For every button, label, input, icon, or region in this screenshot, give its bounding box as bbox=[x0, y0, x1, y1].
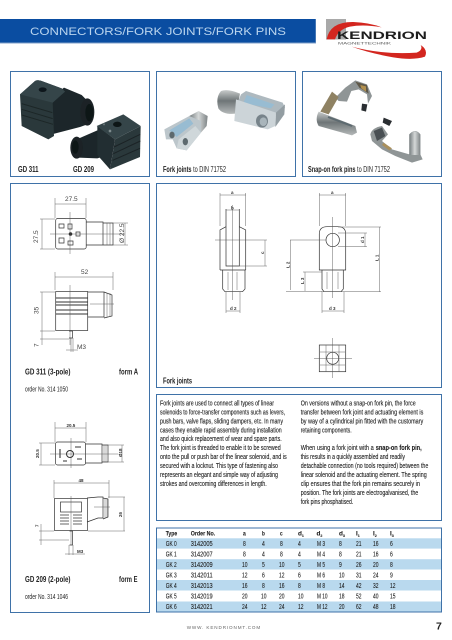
dimension: l2: L 2 bbox=[286, 261, 290, 268]
dimension: l1: L 1 bbox=[374, 254, 380, 261]
row GK 2: 10 bbox=[242, 560, 248, 569]
row GK 4 bbox=[166, 581, 396, 590]
table header: 1 bbox=[358, 534, 360, 538]
row GK 4: GK 4 bbox=[166, 581, 177, 590]
caption: GD 311: GD 311 bbox=[18, 165, 39, 174]
row GK 6: 20 bbox=[339, 602, 344, 611]
row GK 3: 12 bbox=[279, 570, 284, 580]
caption: fork joints to DIN: Fork joints to DIN 71752 bbox=[163, 165, 226, 174]
row GK 1: 6 bbox=[390, 550, 393, 558]
dimension: diameter 22.5: Ø 22.5 bbox=[119, 223, 126, 243]
row GK 4: 42 bbox=[356, 581, 362, 590]
row GK 5: 10 bbox=[298, 592, 304, 600]
photo: closed snap-on pin bbox=[370, 118, 423, 163]
row GK 4: 12 bbox=[390, 581, 396, 590]
row GK 1: GK 1 bbox=[166, 550, 177, 558]
row GK 3: 6 bbox=[298, 570, 301, 580]
row GK 3: GK 3 bbox=[166, 570, 177, 580]
dimension: 7: 7 bbox=[34, 343, 40, 347]
footer url: WWW. KENDRIONMT.COM bbox=[187, 625, 260, 630]
row GK 3: 12 bbox=[242, 570, 248, 580]
dimension: 52: 52 bbox=[81, 269, 89, 276]
row GK 6: 24 bbox=[279, 602, 284, 611]
logo: Kendrion Magnettechnik bbox=[326, 19, 427, 59]
text block: left column: push bars, valve flaps, sliding dampers, etc. In many bbox=[160, 416, 283, 425]
row GK 1: 4 bbox=[298, 550, 301, 558]
row GK 5 bbox=[166, 592, 396, 600]
row GK 4: 16 bbox=[242, 581, 248, 590]
photo: small fork joint bbox=[164, 111, 208, 150]
text block: right column: this results in a quickly assembled and readily bbox=[301, 452, 405, 461]
text block: left column: onto the pull or push bar of the linear solenoid, and is bbox=[160, 452, 287, 461]
header bar bbox=[0, 19, 316, 44]
panel: connector drawings and order data bbox=[10, 184, 150, 612]
text block: left column: The fork joint is threaded to enable it to be screwed bbox=[160, 443, 281, 452]
photo: GD 209 connector bbox=[70, 114, 141, 169]
row GK 2: 10 bbox=[279, 560, 284, 569]
row GK 2 bbox=[166, 560, 393, 569]
row GK 6: 3142021 bbox=[191, 602, 213, 611]
text block: right column: When using a fork joint with a bbox=[301, 443, 374, 452]
dimension: 48: 48 bbox=[78, 478, 84, 483]
photo: open snap-on pin bbox=[317, 80, 372, 135]
text block: left column: secured with a locknut. This type of fastening also bbox=[160, 461, 278, 470]
dimension: M3: M3 bbox=[77, 549, 84, 554]
row GK 1: 4 bbox=[262, 550, 265, 558]
row GK 1: M 4 bbox=[317, 550, 325, 558]
drawing: fork joint end view bbox=[314, 338, 352, 378]
table header: Type bbox=[166, 531, 178, 538]
row GK 2: 3142009 bbox=[191, 560, 213, 569]
text block: left column: cases they enable rapid assembly during installation bbox=[160, 425, 282, 434]
row GK 5: 18 bbox=[339, 592, 344, 600]
panel: snap-on fork pins photo bbox=[302, 72, 442, 176]
row GK 2: 9 bbox=[339, 560, 342, 569]
dimension: diameter 18: Ø18 bbox=[118, 448, 123, 457]
table header: 3 bbox=[392, 534, 394, 538]
label: form E: form E bbox=[119, 574, 138, 584]
table header: l bbox=[356, 531, 358, 538]
drawing: fork joint side view bbox=[215, 190, 267, 313]
row GK 5: GK 5 bbox=[166, 592, 177, 600]
row GK 4: 3142013 bbox=[191, 581, 213, 590]
caption: snap-on fork pins to DIN: Snap-on fork pins to DIN 71752 bbox=[308, 165, 390, 174]
row GK 2: GK 2 bbox=[166, 560, 177, 569]
table header: b bbox=[262, 531, 265, 538]
text block: left column: represents an elegant and simple way of adjusting bbox=[160, 470, 278, 479]
row GK 2: 26 bbox=[356, 560, 362, 569]
row GK 5: 40 bbox=[373, 592, 378, 600]
row GK 6 bbox=[166, 602, 396, 611]
row GK 5: 3142019 bbox=[191, 592, 213, 600]
row GK 3: 24 bbox=[373, 570, 378, 580]
drawing: fork joint front view bbox=[286, 190, 381, 313]
photo: large fork joint bbox=[217, 90, 285, 129]
label: GD 311 (3-pole): GD 311 (3-pole) bbox=[25, 366, 71, 376]
dimension: 26: 26 bbox=[118, 511, 123, 517]
table header: l bbox=[373, 531, 375, 538]
title: CONNECTORS/FORK JOINTS/FORK PINS bbox=[30, 26, 286, 38]
text block: left column bbox=[160, 399, 287, 488]
label: form A: form A bbox=[119, 366, 138, 376]
row GK 3 bbox=[166, 570, 393, 580]
row GK 0: 8 bbox=[339, 539, 342, 548]
dimension: 20.5 width: 20.5 bbox=[66, 423, 76, 428]
row GK 0: 6 bbox=[390, 539, 393, 548]
table header bbox=[166, 531, 394, 538]
row GK 5: 20 bbox=[242, 592, 248, 600]
table header: 2 bbox=[375, 534, 377, 538]
row GK 4: 8 bbox=[262, 581, 265, 590]
row GK 1: 16 bbox=[373, 550, 378, 558]
table header: a bbox=[243, 531, 246, 538]
drawing: GD 311 views bbox=[33, 196, 128, 352]
page number: 7 bbox=[436, 620, 442, 632]
dimension: a: a bbox=[231, 190, 234, 195]
row GK 0: 4 bbox=[262, 539, 265, 548]
row GK 2: M 5 bbox=[317, 560, 325, 569]
dimension: d3: d 3 bbox=[329, 306, 336, 311]
table header: Order No. bbox=[191, 531, 215, 538]
row GK 0: 8 bbox=[280, 539, 283, 548]
row GK 1 bbox=[166, 550, 393, 558]
row GK 6: 18 bbox=[390, 602, 396, 611]
text block: right column bbox=[301, 399, 428, 506]
dimension: M3: M3 bbox=[77, 344, 86, 351]
dimension: 20.5 height: 20.5 bbox=[35, 449, 40, 458]
row GK 5: 52 bbox=[356, 592, 362, 600]
row GK 2: 20 bbox=[373, 560, 378, 569]
row GK 3: M 6 bbox=[317, 570, 325, 580]
table row stripes bbox=[157, 538, 441, 612]
table header: l bbox=[390, 531, 392, 538]
dimension: d1: d 1 bbox=[360, 236, 365, 243]
dimension: d2: d 2 bbox=[230, 306, 237, 311]
text block: left column: solenoids to force-transfer components such as levers, bbox=[160, 408, 285, 416]
row GK 6: M 12 bbox=[317, 602, 328, 611]
table header: 3 bbox=[343, 534, 345, 538]
dimension: 7: 7 bbox=[34, 524, 40, 527]
row GK 0: 4 bbox=[298, 539, 301, 548]
dimension: b: b bbox=[231, 206, 234, 210]
panel: fork joints photo bbox=[156, 72, 296, 176]
row GK 6: 12 bbox=[261, 602, 266, 611]
row GK 4: 16 bbox=[279, 581, 284, 590]
row GK 1: 8 bbox=[280, 550, 283, 558]
row GK 0: 21 bbox=[356, 539, 362, 548]
row GK 4: M 8 bbox=[317, 581, 325, 590]
text block: left column: Fork joints are used to connect all types of linear bbox=[160, 399, 274, 408]
row GK 0: M 3 bbox=[317, 539, 325, 548]
row GK 0: 3142005 bbox=[191, 539, 213, 548]
dimension: 35: 35 bbox=[34, 306, 40, 314]
row GK 4: 32 bbox=[373, 581, 378, 590]
row GK 3: 31 bbox=[356, 570, 362, 580]
text block: left column: strokes and overcoming differences in length. bbox=[160, 479, 267, 488]
dimension: 27.5 width: 27.5 bbox=[65, 196, 78, 203]
label: order no 314 1050: order No. 314 1050 bbox=[25, 384, 68, 394]
dimension: 27.5 height: 27.5 bbox=[33, 230, 40, 243]
row GK 3: 6 bbox=[262, 570, 265, 580]
dimension: a: a bbox=[331, 190, 334, 195]
row GK 3: 9 bbox=[390, 570, 393, 580]
label: GD 209 (2-pole): GD 209 (2-pole) bbox=[25, 574, 71, 584]
row GK 5: 10 bbox=[261, 592, 266, 600]
row GK 6: 48 bbox=[373, 602, 378, 611]
row GK 5: 15 bbox=[390, 592, 396, 600]
row GK 0: GK 0 bbox=[166, 539, 177, 548]
row GK 4: 8 bbox=[298, 581, 301, 590]
text block: right column: retaining components. bbox=[301, 425, 352, 434]
row GK 6: GK 6 bbox=[166, 602, 177, 611]
row GK 6: 12 bbox=[298, 602, 304, 611]
dimension: l3: L 3 bbox=[300, 277, 305, 284]
caption: GD 209: GD 209 bbox=[73, 165, 94, 174]
dimension: c: c bbox=[260, 251, 265, 254]
row GK 0: 8 bbox=[243, 539, 246, 548]
row GK 1: 8 bbox=[243, 550, 246, 558]
row GK 1: 3142007 bbox=[191, 550, 213, 558]
label: fork joints: Fork joints bbox=[163, 376, 192, 386]
row GK 0 bbox=[166, 539, 393, 548]
row GK 3: 3142011 bbox=[191, 570, 213, 580]
row GK 2: 5 bbox=[262, 560, 265, 569]
row GK 3: 10 bbox=[339, 570, 344, 580]
row GK 2: 8 bbox=[390, 560, 393, 569]
table header: c bbox=[280, 531, 283, 538]
panel: connector photo bbox=[10, 72, 150, 176]
row GK 5: 20 bbox=[279, 592, 284, 600]
text block: right column: fork pins phosphatised. bbox=[301, 497, 353, 506]
table header: d bbox=[298, 531, 302, 538]
photo: GD 311 connector bbox=[20, 80, 94, 139]
logo: Kendrion Magnettechnik: KENDRION bbox=[337, 30, 427, 42]
row GK 2: 5 bbox=[298, 560, 301, 569]
table header: d bbox=[339, 531, 343, 538]
panel: description text bbox=[156, 394, 442, 520]
table header: 1 bbox=[302, 534, 304, 538]
label: order no 314 1046: order No. 314 1046 bbox=[25, 592, 68, 601]
text block: left column: and also quick replacement of wear and spare parts. bbox=[160, 434, 282, 443]
row GK 5: M 10 bbox=[317, 592, 328, 600]
table header: 2 bbox=[320, 534, 322, 538]
panel: dimensions table bbox=[156, 528, 442, 612]
panel: fork joint drawings bbox=[156, 184, 442, 388]
drawing: GD 209 views bbox=[34, 422, 125, 555]
row GK 6: 24 bbox=[242, 602, 248, 611]
row GK 0: 16 bbox=[373, 539, 378, 548]
row GK 4: 14 bbox=[339, 581, 344, 590]
logo: Kendrion Magnettechnik: MAGNETTECHNIK bbox=[338, 42, 392, 46]
row GK 1: 21 bbox=[356, 550, 362, 558]
table header: d bbox=[316, 531, 320, 538]
text block: right column: snap-on fork pin, bbox=[376, 443, 422, 452]
row GK 1: 8 bbox=[339, 550, 342, 558]
row GK 6: 62 bbox=[356, 602, 362, 611]
